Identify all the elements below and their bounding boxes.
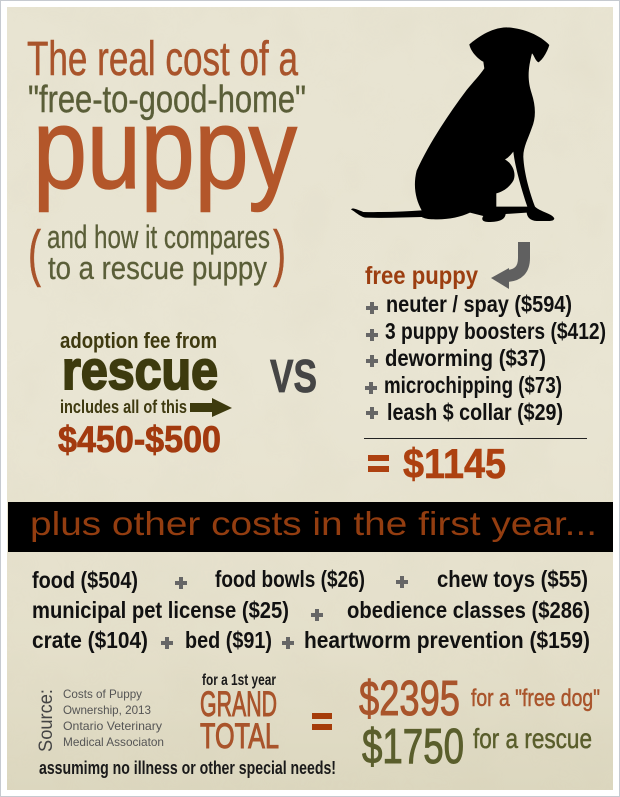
item: deworming: deworming ($37): [385, 345, 546, 371]
cost row 1: food ($504): [32, 567, 138, 593]
cost row 1: food bowls ($26): [215, 566, 365, 592]
right parenthesis: ): [273, 219, 286, 288]
free puppy total: $1145: [403, 440, 506, 487]
panel: rescue adoption fee: [58, 328, 232, 460]
cost row 3: [32, 627, 590, 653]
rescue total: $1750: [362, 720, 464, 774]
grand total label: TOTAL: [200, 717, 279, 756]
item: neuter / spay: neuter / spay ($594): [386, 291, 572, 317]
footnote: assumimg no illness or other special needs!: [39, 758, 336, 778]
panel: free puppy costs: [364, 262, 606, 487]
free puppy total: [368, 440, 506, 487]
arrow: pointing right: [190, 398, 232, 417]
banner: other costs: plus other costs in the first year...: [30, 505, 597, 542]
arrow: curved grey pointing left: [491, 242, 524, 289]
cost row 3: heartworm prevention ($159): [304, 627, 590, 653]
free dog total: [359, 672, 600, 726]
title line 1: The real cost of a: [27, 33, 298, 86]
banner: other costs: [8, 502, 613, 552]
grand total label: GRAND: [200, 685, 277, 724]
subtitle line 2: to a rescue puppy: [48, 250, 267, 286]
title line 2: "free-to-good-home": [28, 79, 306, 121]
panel: other first-year costs: [32, 566, 590, 653]
source text: [63, 687, 164, 749]
source text: Ownership, 2013: [63, 703, 151, 717]
source label: Source:: [36, 689, 57, 752]
title: [27, 33, 306, 288]
grand total label: for a 1st year: [202, 672, 276, 689]
cost row 2: [32, 597, 590, 623]
rescue total: [362, 720, 592, 774]
grand total label: [200, 672, 279, 756]
item: leash and collar: leash $ collar ($29): [387, 399, 563, 425]
left parenthesis: (: [28, 219, 41, 288]
rescue price: $450-$500: [58, 419, 221, 460]
includes label: includes all of this: [60, 397, 187, 417]
source text: Medical Associaton: [63, 735, 164, 749]
versus label: VS: [270, 350, 317, 402]
equals sign: [312, 713, 332, 730]
title word: puppy: puppy: [33, 86, 297, 213]
cost row 1: [32, 566, 588, 593]
cost row 1: chew toys ($55): [437, 566, 588, 592]
source text: Costs of Puppy: [63, 687, 142, 701]
source citation: [36, 687, 164, 752]
free dog total: $2395: [359, 672, 460, 726]
source text: Ontario Veterinary: [63, 719, 162, 733]
cost row 2: obedience classes ($286): [347, 597, 590, 623]
cost row 3: crate ($104): [32, 627, 148, 653]
item: microchipping: microchipping ($73): [384, 372, 562, 398]
adoption fee label: adoption fee from: [60, 328, 217, 353]
free puppy heading: free puppy: [365, 262, 478, 290]
cost row 3: bed ($91): [185, 627, 272, 653]
rescue word: rescue: [62, 339, 218, 401]
icon: sitting dog silhouette: [351, 27, 554, 222]
cost row 2: municipal pet license ($25): [32, 597, 289, 623]
subtitle line 1: and how it compares: [47, 219, 270, 255]
rescue total: for a rescue: [473, 723, 592, 754]
